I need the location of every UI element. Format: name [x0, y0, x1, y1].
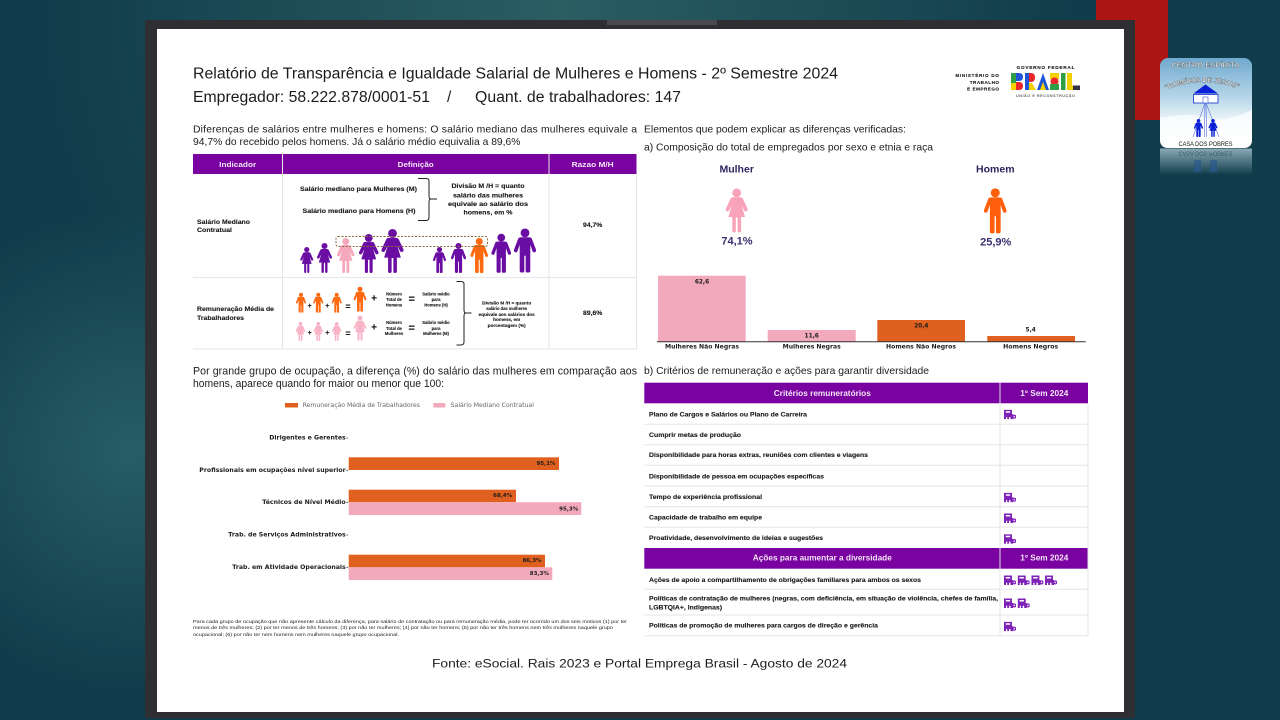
bar chart: wage ratio by occupation: Dirigentes e Gerentes: [269, 436, 346, 442]
report title: /: [447, 89, 452, 106]
report title: Relatório de Transparência e Igualdade Salarial de Mulheres e Homens - 2º Semestre 2024: [193, 66, 838, 83]
bar chart: wage ratio by occupation: 83,3%: [530, 571, 549, 577]
bar chart: wage ratio by occupation: Trab. em Atividade Operacionais: [232, 565, 346, 571]
row: remuneração média: Trabalhadores: [197, 315, 244, 322]
heading: elements explaining differences: Elementos que podem explicar as diferenças verificadas:: [644, 125, 906, 136]
row: salário mediano contratual: Divisão M /H = quanto: [452, 183, 525, 190]
formula: men: +: [371, 294, 377, 305]
source note: Fonte: eSocial. Rais 2023 e Portal Emprega Brasil - Agosto de 2024: [432, 657, 847, 671]
heading: criteria and actions: b) Critérios de remuneração e ações para garantir diversidade: [644, 366, 929, 377]
row: salário mediano contratual: homens, em %: [464, 210, 513, 217]
sex composition: man: [976, 164, 1015, 249]
chart legend: Remuneração Média de Trabalhadores: [303, 402, 420, 409]
action rows: [649, 577, 998, 630]
formula: men: Homens: [386, 302, 403, 307]
formula: men: =: [408, 293, 415, 305]
formula: women: Salário médio: [422, 320, 450, 325]
logo: ministério: MINISTÉRIO DO: [955, 71, 1000, 78]
table: indicators: Definição: [398, 160, 434, 169]
logo: governo federal brasil: [1011, 65, 1080, 98]
table: indicators: [193, 154, 636, 349]
formula: women: Mulheres: [385, 331, 404, 336]
intro text: wage differences: 94,7% do recebido pelos homens. Já o salário médio equivalia a 89,6%: [193, 137, 520, 148]
criteria rows: Disponibilidade para horas extras, reuniões com clientes e viagens: [649, 452, 868, 459]
report title: Quant. de trabalhadores: 147: [475, 89, 681, 106]
criteria rows: Plano de Cargos e Salários ou Plano de Carreira: [649, 411, 807, 418]
formula: men: Número: [386, 291, 402, 296]
logo: centro espírita casa dos pobres: "ROMÁRIA DE JESUS": [1164, 77, 1240, 89]
sex composition: man: 25,9%: [980, 237, 1012, 249]
bar chart: composition by sex and race: 11,6: [805, 333, 819, 339]
footnote: menos de três mulheres; (2) por ter menos de três homens; (3) por não ter mulheres; (4) por não ter homens; (5) por não ter três homens nem três mulheres naquele grupo: [193, 625, 613, 630]
bar chart: wage ratio by occupation: [199, 402, 581, 580]
heading: elements explaining differences: [644, 124, 933, 154]
row: salário mediano contratual: Contratual: [197, 227, 232, 234]
bar chart: composition by sex and race: Mulheres Não Negras: [665, 344, 740, 350]
criteria rows: Disponibilidade de pessoa em ocupações específicas: [649, 473, 824, 480]
logo: centro espírita casa dos pobres: [1160, 58, 1252, 173]
red corner accent: [1096, 0, 1168, 120]
intro text: wage differences: Diferenças de salários entre mulheres e homens: O salário mediano das mulheres equivale a: [193, 125, 637, 136]
table: remuneration criteria and diversity actions: [644, 383, 1088, 636]
check icons: [1004, 410, 1057, 631]
footnote: [193, 619, 628, 637]
logo: ministério: TRABALHO: [970, 80, 1000, 85]
formula: men: +: [308, 303, 312, 310]
table: remuneration criteria and diversity actions: Critérios remuneratórios: [774, 389, 871, 398]
row: salário mediano contratual: 94,7%: [583, 222, 602, 229]
row: remuneração média: Remuneração Média de: [197, 306, 274, 313]
row: remuneração média: [197, 282, 602, 345]
row: remuneração média: Divisão M /H = quanto: [482, 300, 532, 305]
report title: Empregador: 58.222.878/0001-51: [193, 89, 430, 106]
row: salário mediano contratual: salário das mulheres: [453, 192, 523, 199]
formula: women: Mulheres (M): [423, 331, 450, 336]
row: salário mediano contratual: Salário mediano para Mulheres (M): [300, 186, 417, 193]
table: remuneration criteria and diversity actions: 1º Sem 2024: [1020, 389, 1069, 398]
action rows: Ações de apoio a compartilhamento de obrigações familiares para ambos os sexos: [649, 577, 921, 584]
formula: women: +: [325, 330, 329, 337]
intro text: wage differences: [193, 124, 637, 148]
formula: women: Total de: [386, 326, 403, 331]
row: salário mediano contratual: equivale ao salário dos: [448, 201, 528, 208]
table: indicators: Indicador: [219, 160, 256, 169]
formula: women: =: [408, 322, 415, 334]
bar chart: wage ratio by occupation: 68,4%: [493, 493, 513, 499]
footnote: Para cada grupo de ocupação que não apresente cálculo da diferença, para salário de contratação ou para remuneração média, pode ter ocorrido um dos seis motivos (1) por ter: [193, 619, 628, 624]
table: indicators: Razao M/H: [572, 160, 614, 169]
bar chart: composition by sex and race: Homens Não Negros: [886, 344, 957, 350]
formula: men: +: [325, 303, 329, 310]
sex composition: man: Homem: [976, 164, 1015, 176]
heading: elements explaining differences: a) Composição do total de empregados por sexo e etnia e raça: [644, 143, 933, 154]
criteria rows: Capacidade de trabalho em equipe: [649, 514, 762, 521]
people illustration: women and men: [300, 228, 536, 273]
formula: women: [296, 316, 450, 341]
table: remuneration criteria and diversity actions: 1º Sem 2024: [1020, 553, 1069, 562]
document frame: [145, 20, 1135, 718]
logo: centro espírita casa dos pobres: CENTRO ESPÍRITA: [1172, 61, 1240, 70]
formula: women: +: [371, 323, 377, 334]
row: remuneração média: porcentagem (%): [488, 323, 526, 328]
logo: centro espírita casa dos pobres: CASA DOS POBRES: [1178, 141, 1232, 148]
formula: men: para: [432, 297, 441, 302]
criteria rows: Cumprir metas de produção: [649, 432, 741, 439]
formula: men: [296, 287, 450, 313]
bar chart: wage ratio by occupation: 86,3%: [522, 558, 542, 564]
formula: women: =: [345, 329, 351, 339]
logo: ministério: E EMPREGO: [967, 87, 1000, 92]
bar chart: composition by sex and race: 62,6: [695, 279, 709, 285]
row: salário mediano contratual: Salário Mediano: [197, 219, 250, 226]
formula: women: Número: [386, 320, 402, 325]
formula: men: Total de: [386, 297, 403, 302]
logo: governo federal brasil: GOVERNO FEDERAL: [1016, 65, 1075, 71]
bar chart: wage ratio by occupation: Técnicos de Nível Médio: [262, 499, 346, 506]
logo reflection: CASA DOS POBRES: [1178, 150, 1232, 156]
formula: women: para: [432, 326, 441, 331]
row: remuneração média: salário das mulheres: [486, 306, 528, 311]
heading: occupation groups: [193, 365, 637, 390]
bar chart: wage ratio by occupation: Profissionais em ocupações nível superior: [199, 467, 346, 474]
bar chart: composition by sex and race: [657, 276, 1086, 350]
formula: men: =: [345, 301, 351, 311]
bar chart: composition by sex and race: 5,4: [1026, 327, 1036, 333]
action rows: LGBTQIA+, Indígenas): [649, 604, 722, 611]
formula: men: Homens (H): [424, 302, 448, 307]
bar chart: wage ratio by occupation: Trab. de Serviços Administrativos: [228, 533, 346, 539]
row: remuneração média: equivale aos salários dos: [479, 312, 535, 317]
bar chart: composition by sex and race: Homens Negros: [1003, 344, 1059, 350]
report title: [193, 66, 838, 106]
formula: women: +: [308, 330, 312, 337]
heading: occupation groups: Por grande grupo de ocupação, a diferença (%) do salário das mulheres em comparação aos: [193, 365, 637, 377]
criteria rows: Tempo de experiência profissional: [649, 494, 762, 501]
criteria rows: Proatividade, desenvolvimento de ideias e sugestões: [649, 535, 823, 542]
action rows: Políticas de contratação de mulheres (negras, com deficiência, em situação de violência, chefes de família,: [649, 595, 998, 602]
chart legend: Salário Mediano Contratual: [451, 402, 534, 409]
chart legend: [285, 402, 534, 409]
sex composition: woman: 74,1%: [721, 236, 753, 248]
row: salário mediano contratual: [197, 178, 602, 273]
logo: ministério: [955, 71, 1000, 92]
bar chart: composition by sex and race: 20,4: [914, 324, 928, 330]
bar chart: composition by sex and race: Mulheres Negras: [783, 344, 841, 350]
heading: occupation groups: homens, aparece quando for maior ou menor que 100:: [193, 378, 444, 390]
row: salário mediano contratual: Salário mediano para Homens (H): [302, 208, 416, 215]
action rows: Políticas de promoção de mulheres para cargos de direção e gerência: [649, 622, 878, 629]
sex composition: woman: [719, 164, 754, 248]
formula: men: Salário médio: [422, 291, 450, 296]
logo: governo federal brasil: UNIÃO E RECONSTRUÇÃO: [1016, 93, 1075, 98]
footnote: ocupacional; (6) por não ter nem homens nem mulheres naquele grupo ocupacional.: [193, 632, 399, 637]
sex composition: woman: Mulher: [719, 164, 754, 176]
row: remuneração média: 89,6%: [583, 310, 602, 317]
row: remuneração média: homens, em: [493, 317, 520, 322]
table: remuneration criteria and diversity actions: Ações para aumentar a diversidade: [753, 553, 892, 562]
bar chart: wage ratio by occupation: 95,3%: [559, 506, 579, 512]
criteria rows: [649, 412, 868, 542]
bar chart: wage ratio by occupation: 95,1%: [536, 461, 556, 467]
